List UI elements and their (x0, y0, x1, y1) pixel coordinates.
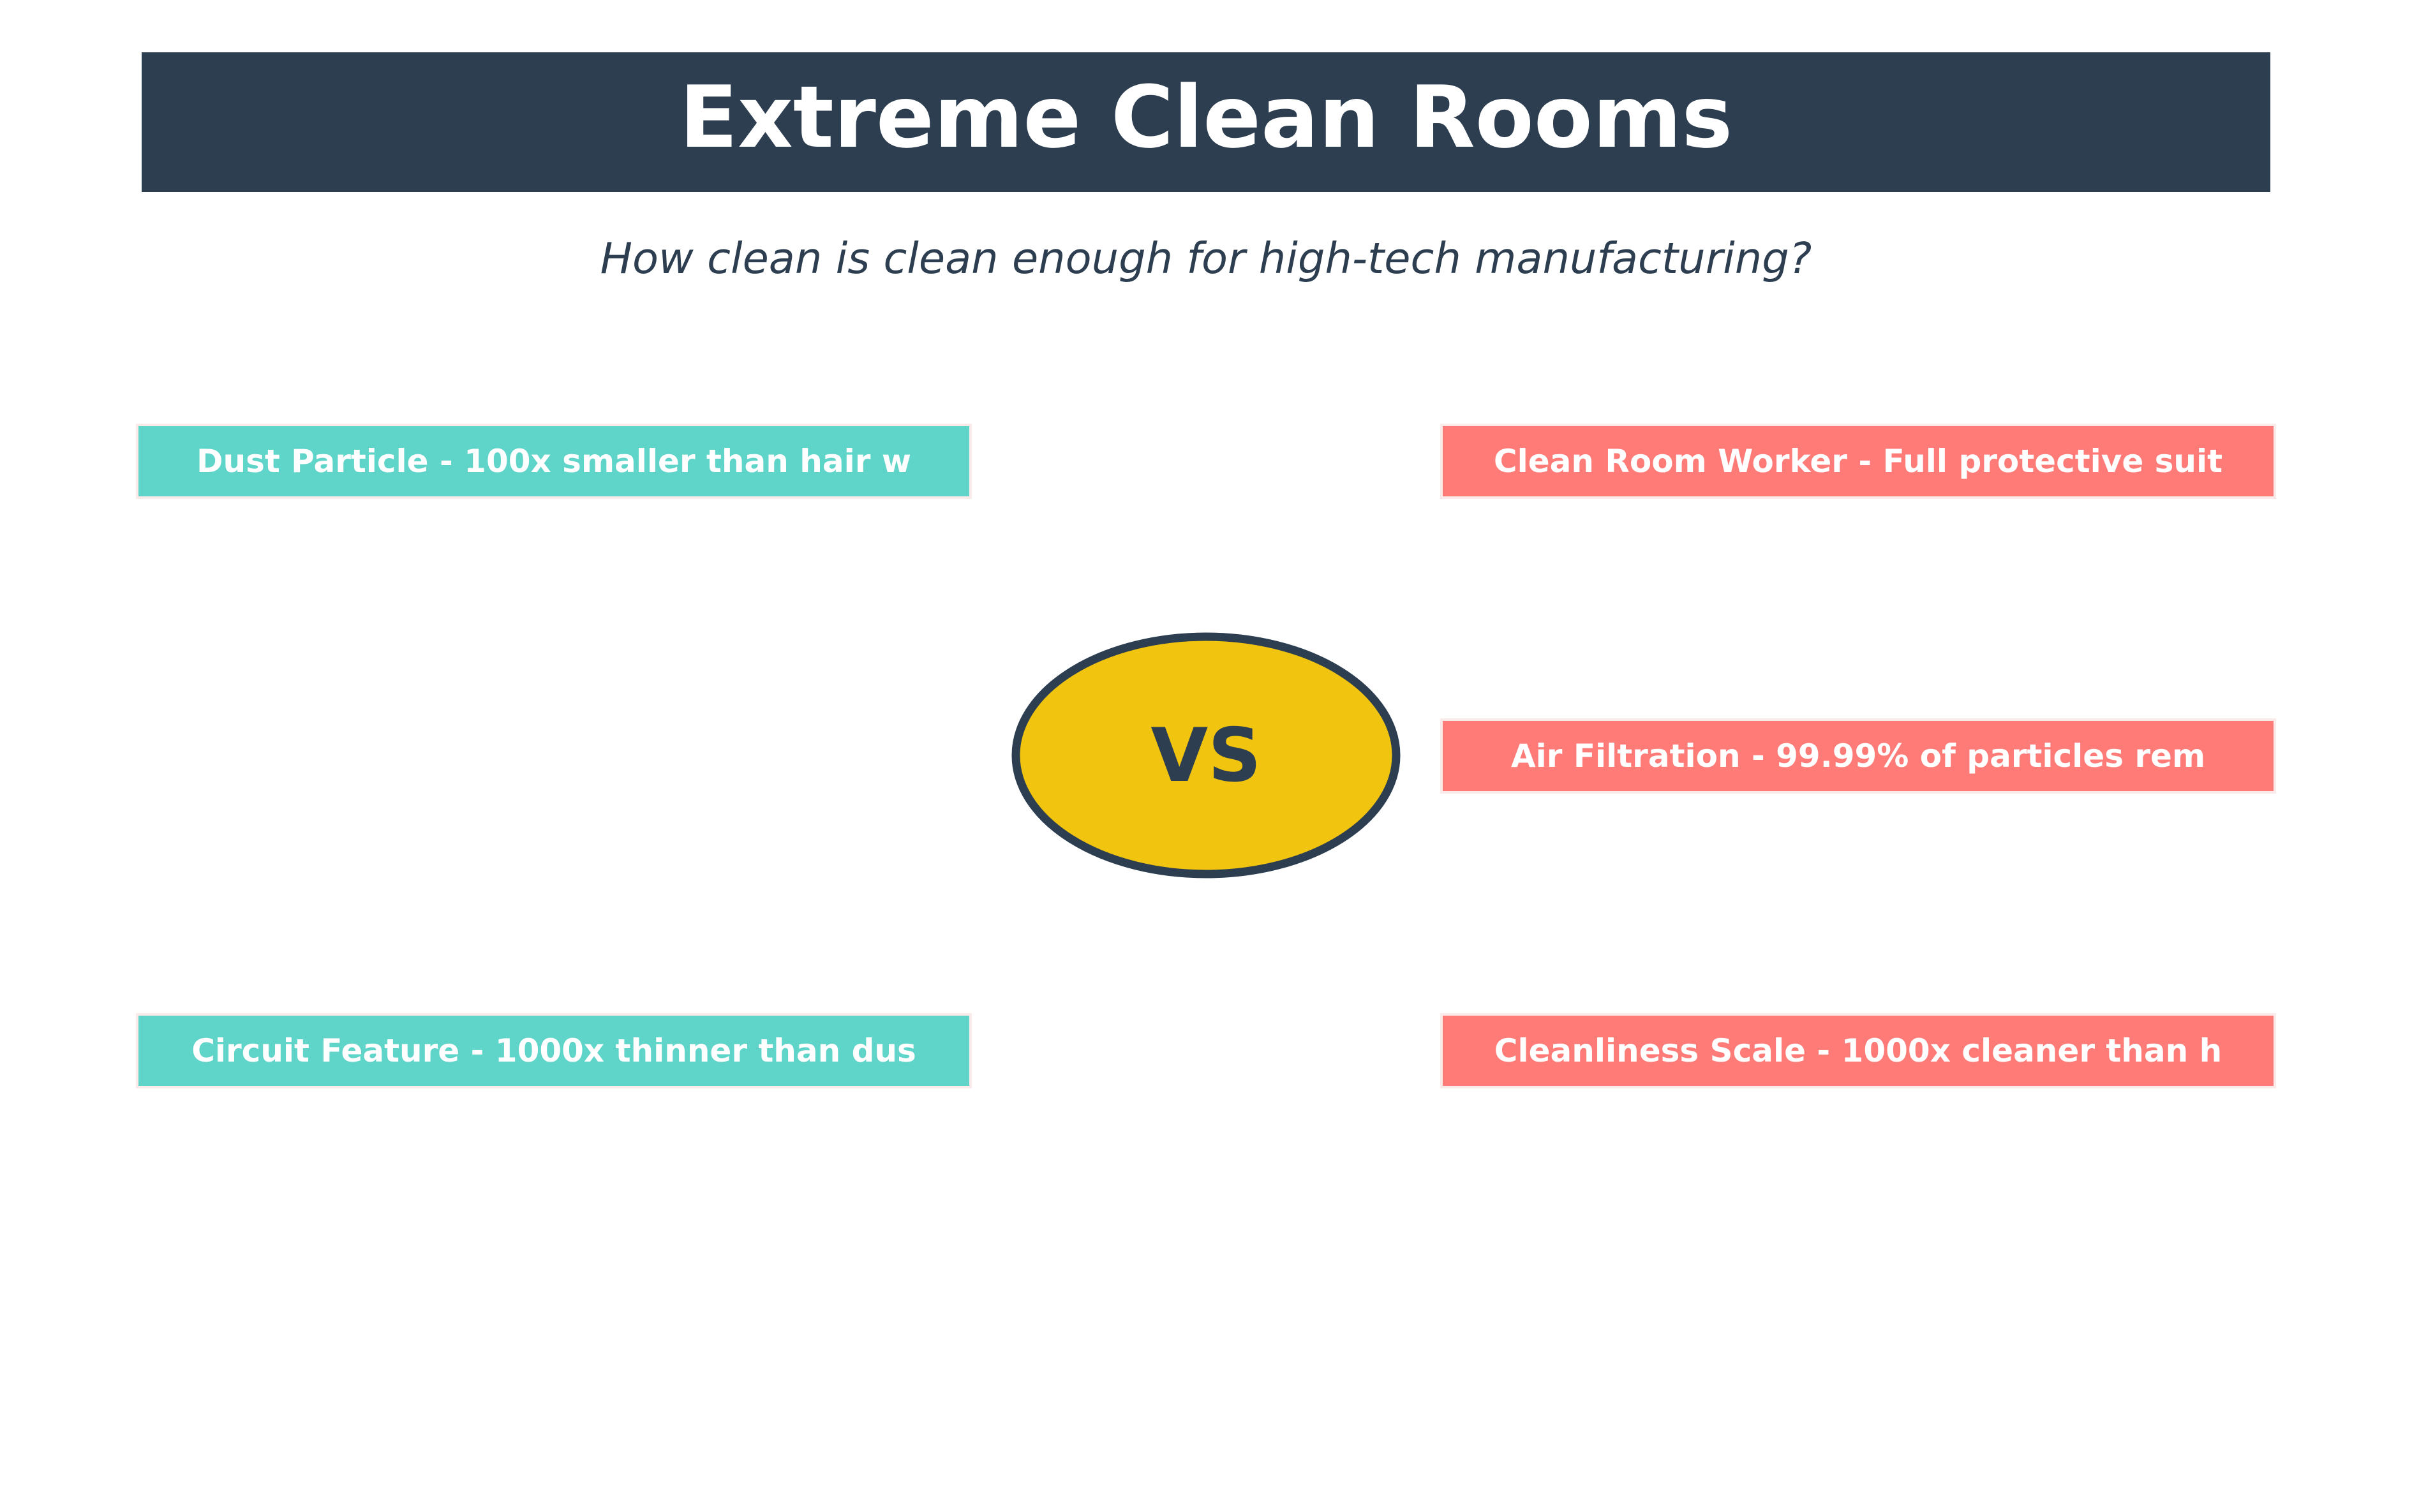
label: air filtration: Air Filtration - 99.99% of particles rem (1511, 737, 2205, 775)
label: cleanliness scale: Cleanliness Scale - 1000x cleaner than h (1494, 1032, 2222, 1069)
subtitle: How clean is clean enough for high-tech manufacturing? (600, 233, 1812, 283)
label: air filtration (1440, 718, 2276, 794)
vs badge (1012, 633, 1400, 878)
title: Extreme Clean Rooms (680, 68, 1732, 167)
label: dust particle (136, 424, 972, 499)
label: circuit feature: Circuit Feature - 1000x thinner than dus (191, 1032, 916, 1069)
label: clean room worker (1440, 424, 2276, 499)
title (142, 52, 2270, 192)
label: circuit feature (136, 1013, 972, 1088)
label: clean room worker: Clean Room Worker - Full protective suit (1494, 443, 2222, 480)
label: dust particle: Dust Particle - 100x smaller than hair w (197, 443, 911, 480)
vs badge: VS (1150, 713, 1262, 799)
label: cleanliness scale (1440, 1013, 2276, 1088)
